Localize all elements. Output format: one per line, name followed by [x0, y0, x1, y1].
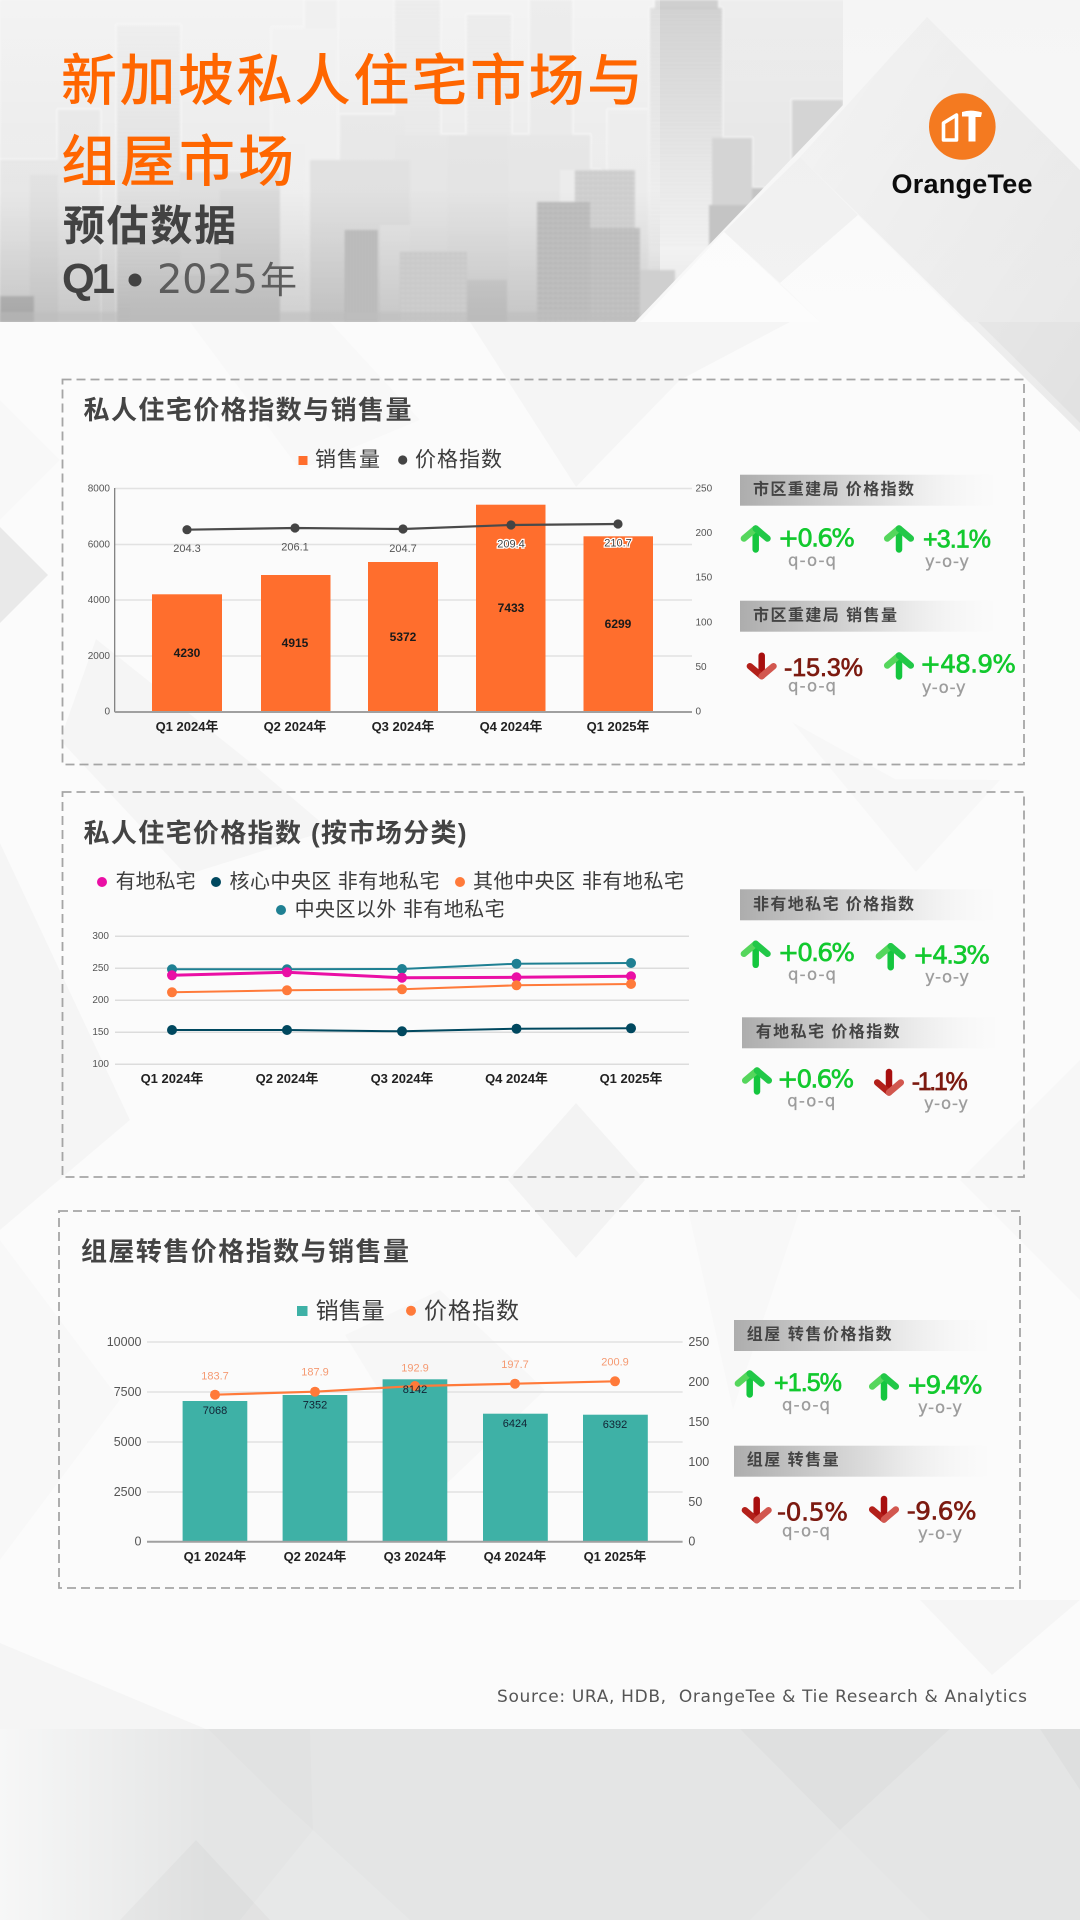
combo chart: sales bars and price line: 8000	[88, 484, 110, 494]
stat band: resale volume: 组屋 转售量	[747, 1450, 839, 1469]
stat: y-o-y -9.6%: -9.6%	[907, 1496, 977, 1525]
logo: OrangeTee: OrangeTee	[892, 169, 1032, 199]
panel: private residential price index by market segment	[62, 792, 1024, 1177]
period label: 年	[260, 250, 297, 304]
combo chart: sales bars and price line: Q3 2024年	[372, 719, 434, 734]
combo chart: resale sales bars and price line	[107, 1335, 709, 1564]
series: rest of central region	[167, 979, 636, 997]
stat band: landed price index	[742, 1017, 995, 1048]
chart legend: 销售量	[315, 448, 380, 472]
header skyline image	[0, 0, 850, 322]
stat band: non-landed price index: 非有地私宅 价格指数	[753, 894, 914, 914]
combo chart: sales bars and price line: 6000	[88, 540, 110, 550]
combo chart: resale sales bars and price line: 100	[688, 1455, 709, 1469]
chart legend: 有地私宅	[116, 870, 196, 893]
combo chart: resale sales bars and price line: 6424	[503, 1418, 527, 1430]
chart legend	[97, 870, 684, 921]
heading: 组屋转售价格指数与销售量	[81, 1237, 409, 1267]
combo chart: resale sales bars and price line: 197.7	[501, 1359, 529, 1371]
stat band: URA price index	[740, 475, 993, 506]
line chart: four market segments: 250	[92, 963, 109, 974]
combo chart: resale sales bars and price line: 250	[688, 1335, 709, 1349]
combo chart: sales bars and price line: 0	[104, 706, 110, 718]
stat band: landed price index: 有地私宅 价格指数	[756, 1022, 900, 1041]
stat: q-o-q -15.3%: -15.3%	[784, 654, 863, 682]
subtitle: 预估数据	[63, 202, 236, 250]
combo chart: sales bars and price line: 209.4	[497, 539, 525, 551]
title	[61, 50, 643, 194]
stat: y-o-y +9.4%	[872, 1370, 983, 1417]
combo chart: sales bars and price line: 4230	[174, 646, 201, 660]
combo chart: sales bars and price line: 4915	[282, 636, 309, 650]
stat: q-o-q +1.5%: q-o-q	[782, 1396, 830, 1415]
line chart: four market segments: Q3 2024年	[371, 1071, 433, 1086]
line chart: four market segments: Q1 2024年	[141, 1071, 203, 1086]
combo chart: sales bars and price line: Q1 2024年	[156, 719, 218, 734]
combo chart: sales bars and price line: 204.3	[173, 543, 201, 555]
stat: q-o-q +0.6%	[745, 1064, 854, 1111]
combo chart: sales bars and price line: 250	[696, 484, 713, 494]
stat: y-o-y -9.6%: y-o-y	[918, 1524, 962, 1543]
combo chart: resale sales bars and price line: 7500	[114, 1385, 142, 1399]
combo chart: sales bars and price line: 100	[696, 618, 713, 628]
combo chart: sales bars and price line: 50	[696, 662, 707, 673]
stat: y-o-y +9.4%: +9.4%	[907, 1370, 983, 1399]
stat: y-o-y +4.3%	[879, 940, 990, 987]
title: 新加坡私人住宅市场与	[61, 50, 643, 112]
combo chart: resale sales bars and price line: 0	[135, 1535, 142, 1549]
stat: y-o-y +3.1%: y-o-y	[925, 552, 969, 571]
period label: Q1	[62, 255, 115, 302]
logo: OrangeTee	[892, 93, 1032, 199]
stat: y-o-y +3.1%: +3.1%	[923, 526, 991, 554]
stat: y-o-y -1.1%	[877, 1068, 968, 1113]
combo chart: resale sales bars and price line: Q1 2024年	[184, 1549, 246, 1564]
stat: q-o-q +0.6%: q-o-q	[788, 965, 836, 984]
stat: q-o-q -0.5%: -0.5%	[777, 1498, 848, 1527]
stat: q-o-q +0.6%: q-o-q	[788, 551, 836, 570]
combo chart: resale sales bars and price line: 5000	[114, 1435, 142, 1449]
combo chart: resale sales bars and price line: 50	[688, 1495, 702, 1509]
combo chart: resale sales bars and price line: Q2 2024年	[284, 1549, 346, 1564]
combo chart: resale sales bars and price line: 7068	[203, 1405, 227, 1417]
heading: 私人住宅价格指数与销售量	[84, 395, 412, 425]
chart legend: 中央区以外 非有地私宅	[295, 898, 505, 921]
combo chart: sales bars and price line: 150	[696, 572, 713, 584]
stat: q-o-q +0.6%: +0.6%	[777, 1064, 854, 1093]
combo chart: resale sales bars and price line: Q4 2024年	[484, 1549, 546, 1564]
combo chart: resale sales bars and price line: 7352	[303, 1400, 327, 1412]
stat: y-o-y -1.1%: y-o-y	[924, 1094, 968, 1113]
stat band: resale volume	[734, 1446, 987, 1477]
combo chart: sales bars and price line: 6299	[605, 617, 632, 631]
stat: y-o-y -1.1%: -1.1%	[912, 1068, 968, 1096]
stat: y-o-y +48.9%	[887, 650, 1016, 697]
combo chart: sales bars and price line: 0	[696, 706, 702, 718]
combo chart: sales bars and price line: 200	[696, 528, 713, 539]
period label: 2025	[157, 257, 258, 303]
stat: q-o-q +0.6%	[744, 938, 855, 984]
combo chart: resale sales bars and price line: 183.7	[201, 1370, 229, 1382]
combo chart: sales bars and price line	[88, 484, 713, 734]
chart legend	[298, 448, 502, 472]
combo chart: resale sales bars and price line: 192.9	[401, 1362, 429, 1374]
stat: q-o-q -0.5%: q-o-q	[782, 1522, 830, 1541]
stat: q-o-q +1.5%	[738, 1369, 842, 1415]
stat: q-o-q -15.3%	[750, 654, 863, 696]
combo chart: sales bars and price line: 5372	[390, 630, 417, 644]
stat: q-o-q -15.3%: q-o-q	[788, 676, 836, 696]
period label	[62, 250, 297, 304]
line chart: four market segments: 200	[92, 995, 109, 1006]
stat band: non-landed price index	[740, 889, 993, 920]
panel: HDB resale price index and sales	[59, 1211, 1020, 1588]
series: core central region	[167, 1023, 636, 1036]
source note: Source: URA, HDB, OrangeTee & Tie Research & Analytics	[497, 1687, 1027, 1707]
stat: q-o-q +0.6%: q-o-q	[787, 1092, 835, 1111]
chart legend: 其他中央区 非有地私宅	[473, 870, 684, 893]
line chart: four market segments: Q2 2024年	[256, 1071, 318, 1086]
stat band: URA sales	[740, 601, 993, 632]
stat: q-o-q +0.6%: +0.6%	[778, 938, 855, 967]
heading: 私人住宅价格指数 (按市场分类)	[84, 818, 466, 848]
combo chart: resale sales bars and price line: 2500	[114, 1485, 142, 1499]
stat band: URA price index: 市区重建局 价格指数	[753, 480, 914, 498]
chart legend: 价格指数	[415, 448, 502, 472]
combo chart: resale sales bars and price line: 10000	[107, 1335, 142, 1349]
line chart: four market segments: Q4 2024年	[485, 1071, 548, 1086]
series: landed	[167, 967, 636, 983]
combo chart: sales bars and price line: Q1 2025年	[587, 719, 649, 734]
combo chart: sales bars and price line: 206.1	[281, 542, 309, 554]
combo chart: resale sales bars and price line: 200	[688, 1375, 709, 1389]
combo chart: sales bars and price line: 204.7	[389, 543, 417, 555]
panel: private residential price index and sales	[62, 380, 1024, 764]
stat: q-o-q -0.5%	[745, 1498, 848, 1541]
chart legend	[297, 1298, 519, 1324]
line chart: four market segments: 300	[92, 931, 109, 942]
combo chart: sales bars and price line: 7433	[498, 601, 525, 615]
title: 组屋市场	[61, 130, 294, 194]
stat band: resale price index: 组屋 转售价格指数	[747, 1324, 892, 1344]
stat: y-o-y +3.1%	[887, 526, 991, 571]
line chart: four market segments: 150	[92, 1027, 109, 1038]
stat band: URA sales: 市区重建局 销售量	[753, 606, 897, 624]
chart legend: 销售量	[316, 1298, 385, 1324]
combo chart: resale sales bars and price line: 6392	[603, 1419, 627, 1431]
stat: y-o-y +4.3%: +4.3%	[913, 940, 990, 969]
combo chart: sales bars and price line: 210.7	[604, 537, 632, 549]
chart legend: 核心中央区 非有地私宅	[230, 870, 440, 893]
stat: y-o-y +48.9%: y-o-y	[922, 678, 966, 697]
combo chart: resale sales bars and price line: Q1 2025年	[584, 1549, 646, 1564]
line chart: four market segments: Q1 2025年	[600, 1071, 662, 1086]
line chart: four market segments	[92, 931, 689, 1086]
stat band: resale price index	[734, 1320, 987, 1351]
combo chart: resale sales bars and price line: 200.9	[601, 1357, 629, 1369]
stat: y-o-y +48.9%: +48.9%	[920, 650, 1016, 678]
combo chart: resale sales bars and price line: 8142	[403, 1384, 427, 1396]
stat: q-o-q +1.5%: +1.5%	[774, 1369, 842, 1397]
combo chart: sales bars and price line: Q4 2024年	[480, 719, 542, 734]
stat: q-o-q +0.6%	[744, 524, 855, 570]
combo chart: resale sales bars and price line: 187.9	[301, 1367, 329, 1379]
combo chart: sales bars and price line: 2000	[88, 651, 110, 662]
stat: y-o-y +4.3%: y-o-y	[925, 968, 969, 987]
combo chart: resale sales bars and price line: 0	[688, 1535, 695, 1549]
combo chart: sales bars and price line: 4000	[88, 595, 110, 606]
stat: y-o-y +9.4%: y-o-y	[918, 1398, 962, 1417]
combo chart: resale sales bars and price line: 150	[688, 1415, 709, 1429]
stat: y-o-y -9.6%	[872, 1496, 977, 1543]
line chart: four market segments: 100	[92, 1059, 109, 1070]
series: outside central region	[167, 958, 636, 974]
combo chart: sales bars and price line: Q2 2024年	[264, 719, 326, 734]
combo chart: resale sales bars and price line: Q3 2024年	[384, 1549, 446, 1564]
stat: q-o-q +0.6%: +0.6%	[778, 524, 855, 552]
chart legend: 价格指数	[424, 1298, 519, 1324]
